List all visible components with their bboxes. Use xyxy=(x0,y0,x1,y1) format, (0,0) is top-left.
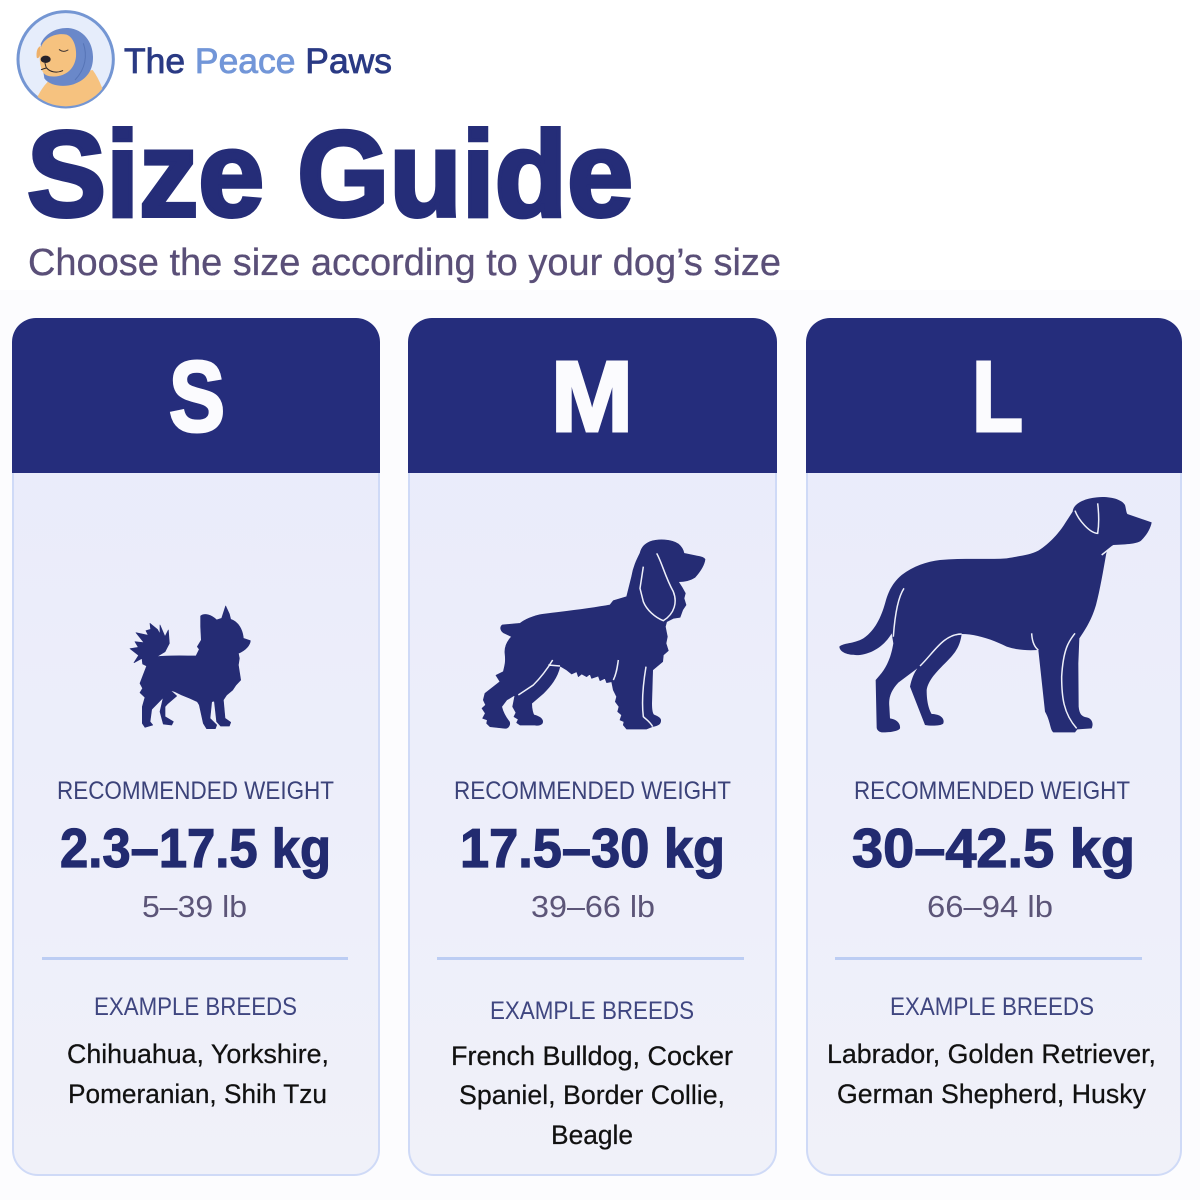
breed list: French Bulldog, Cocker xyxy=(451,1041,733,1071)
panel: size L xyxy=(806,318,1182,1175)
icon: labrador silhouette xyxy=(839,497,1152,732)
breed list: Labrador, Golden Retriever, xyxy=(827,1039,1156,1069)
weight in pounds: 39–66 lb xyxy=(531,889,655,924)
label: recommended weight: RECOMMENDED WEIGHT xyxy=(454,777,731,805)
weight in kilograms: 17.5–30 kg xyxy=(460,817,725,879)
label: example breeds: EXAMPLE BREEDS xyxy=(490,997,694,1025)
panel: size S xyxy=(12,318,380,1175)
weight in kilograms: 2.3–17.5 kg xyxy=(60,817,331,879)
weight in pounds: 66–94 lb xyxy=(927,889,1053,924)
label: recommended weight: RECOMMENDED WEIGHT xyxy=(57,777,334,805)
logo: The Peace Paws xyxy=(18,12,392,110)
icon: chihuahua silhouette xyxy=(130,606,250,729)
header: M xyxy=(408,318,777,473)
breed list: German Shepherd, Husky xyxy=(837,1079,1146,1109)
weight in kilograms: 30–42.5 kg xyxy=(852,817,1135,879)
breed list: Spaniel, Border Collie, xyxy=(459,1080,725,1110)
subtitle: Choose the size according to your dog’s size xyxy=(28,242,781,284)
header: S xyxy=(12,318,380,473)
panel: size M xyxy=(408,318,777,1175)
breed list: Beagle xyxy=(551,1120,633,1150)
header: L xyxy=(806,318,1182,473)
breed list xyxy=(451,1041,733,1150)
header: L: L xyxy=(972,341,1023,453)
weight in pounds: 5–39 lb xyxy=(142,889,247,924)
title: Size Guide xyxy=(27,106,633,242)
label: example breeds: EXAMPLE BREEDS xyxy=(890,993,1094,1021)
icon: spaniel silhouette xyxy=(482,540,705,729)
icon: dog wearing calming hood xyxy=(18,12,113,110)
label: recommended weight: RECOMMENDED WEIGHT xyxy=(854,777,1130,805)
breed list xyxy=(827,1039,1156,1109)
header: M: M xyxy=(551,341,633,453)
header: S: S xyxy=(169,341,225,453)
breed list xyxy=(67,1039,329,1109)
breed list: Chihuahua, Yorkshire, xyxy=(67,1039,329,1069)
brand name: The Peace Paws xyxy=(124,42,392,81)
label: example breeds: EXAMPLE BREEDS xyxy=(94,993,297,1021)
breed list: Pomeranian, Shih Tzu xyxy=(68,1079,327,1109)
